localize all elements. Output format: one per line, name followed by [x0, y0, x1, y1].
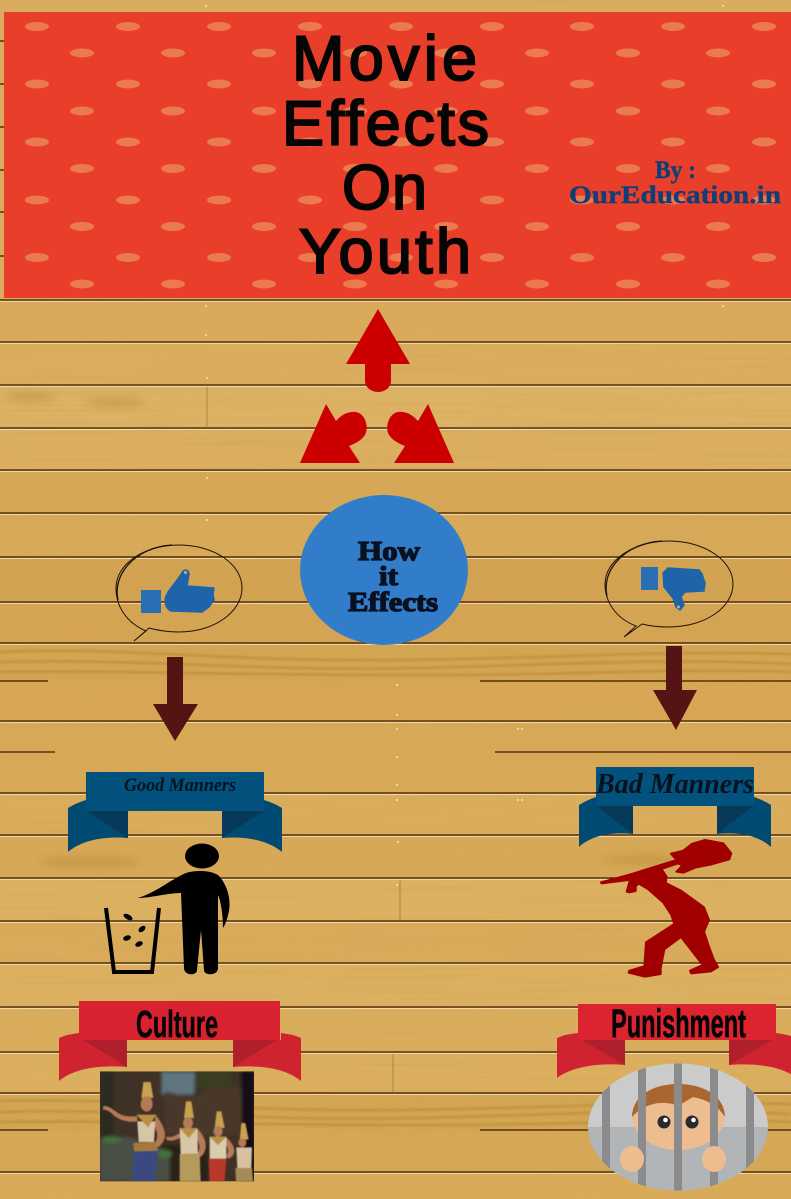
title: Movie [292, 24, 477, 94]
ribbon: bad manners [579, 767, 771, 847]
circle: how it effects: it [379, 561, 398, 591]
title: Effects [282, 89, 489, 159]
illustration: boy behind prison bars [588, 1063, 768, 1191]
circle: how it effects: How [358, 536, 421, 566]
byline [569, 157, 781, 209]
title: Youth [299, 217, 471, 287]
ribbon: culture [59, 1001, 301, 1081]
title: On [342, 153, 427, 223]
ribbon: punishment [557, 1002, 791, 1078]
icon: speech bubble with thumbs up [116, 545, 242, 641]
circle: how it effects: Effects [348, 587, 438, 617]
circle: how it effects [300, 495, 468, 645]
icon: speech bubble with thumbs down [605, 541, 733, 637]
ribbon: bad manners: Bad Manners [595, 768, 754, 800]
icon: person using trash bin [106, 844, 230, 974]
arrow: left down [153, 657, 198, 741]
byline: By : [655, 157, 696, 184]
byline: OurEducation.in [569, 182, 781, 209]
icon: three red arrows [300, 309, 454, 463]
ribbon: good manners: Good Manners [124, 775, 236, 796]
arrow: right down [653, 646, 697, 730]
title [282, 24, 489, 287]
ribbon: culture: Culture [136, 1004, 218, 1046]
ribbon: good manners [68, 772, 282, 852]
panel: title banner [4, 12, 791, 298]
photo: cambodian dancers [100, 1071, 255, 1181]
icon: man smashing guitar [601, 840, 731, 977]
